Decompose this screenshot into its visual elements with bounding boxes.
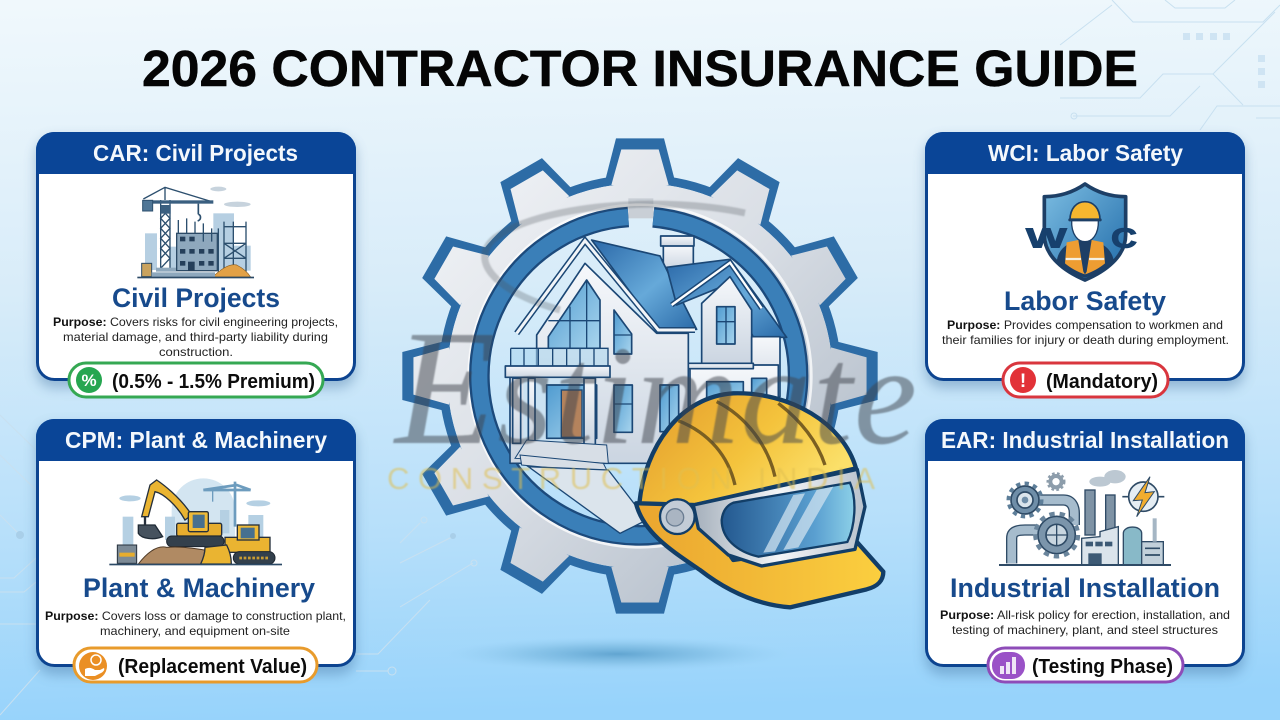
subheading: Civil Projects — [112, 283, 280, 313]
gable window — [548, 280, 600, 348]
title: 2026 CONTRACTOR INSURANCE GUIDE — [142, 40, 1138, 97]
walkway — [528, 467, 647, 533]
badge: replacement value — [74, 648, 317, 682]
purpose text: Purpose: Covers risks for civil engineering projects, — [53, 315, 338, 329]
card header — [36, 132, 356, 174]
card body — [38, 420, 354, 666]
steps — [515, 440, 608, 473]
icon: construction site — [137, 187, 254, 278]
badge: replacement value: (Replacement Value) — [118, 656, 307, 678]
purpose text: machinery, and equipment on-site — [100, 624, 290, 638]
subheading: Plant & Machinery — [83, 573, 315, 603]
purpose text — [45, 609, 346, 638]
card header — [36, 419, 356, 461]
purpose text: their families for injury or death during employment. — [942, 333, 1229, 347]
badge: premium — [69, 363, 323, 397]
card header — [925, 132, 1245, 174]
purpose text — [53, 315, 338, 359]
purpose text: Purpose: Covers loss or damage to construction plant, — [45, 609, 346, 623]
door — [561, 390, 582, 437]
purpose text: Purpose: All-risk policy for erection, installation, and — [940, 608, 1230, 622]
badge: mandatory: ! — [1020, 371, 1026, 392]
main roof — [592, 240, 697, 330]
purpose text — [942, 318, 1229, 347]
subheading: Industrial Installation — [950, 573, 1220, 603]
right wing roof — [667, 259, 787, 337]
purpose text — [940, 608, 1230, 637]
heading: WCI: Labor Safety — [988, 140, 1183, 166]
purpose text: construction. — [159, 345, 233, 359]
badge: mandatory — [1003, 363, 1168, 397]
watermark logo: Estimate — [393, 296, 917, 479]
ground shadow — [448, 637, 788, 671]
icon: factory and gears — [999, 470, 1171, 566]
visor glass — [722, 483, 854, 557]
badge: testing phase: (Testing Phase) — [1032, 656, 1173, 678]
main wall — [510, 263, 688, 463]
lower windows — [614, 385, 632, 432]
icon: worker shield — [1026, 184, 1137, 280]
dome — [639, 393, 856, 505]
house — [505, 236, 787, 533]
icon: worker shield: W — [1026, 223, 1068, 254]
panel: CPM plant and machinery — [36, 419, 356, 682]
badge: premium: % — [81, 371, 97, 390]
card header — [925, 419, 1245, 461]
purpose text: Purpose: Provides compensation to workmen and — [947, 318, 1223, 332]
purpose text: material damage, and third-party liability during — [63, 330, 328, 344]
panel: EAR industrial installation — [925, 419, 1245, 682]
heading: CAR: Civil Projects — [93, 140, 298, 166]
watermark logo — [387, 204, 917, 496]
badge: mandatory: (Mandatory) — [1046, 371, 1158, 393]
heading: CPM: Plant & Machinery — [65, 427, 327, 453]
card body — [38, 134, 354, 380]
panel: WCI labor safety — [925, 132, 1245, 397]
badge: premium: (0.5% - 1.5% Premium) — [112, 371, 315, 393]
porch — [523, 378, 593, 442]
icon: worker shield: C — [1111, 223, 1137, 254]
subheading: Labor Safety — [1004, 286, 1166, 316]
balcony — [505, 348, 610, 377]
brim — [636, 503, 883, 607]
badge: testing phase — [988, 648, 1183, 682]
card body — [926, 420, 1244, 666]
side knob — [660, 499, 695, 534]
icon: excavator and bulldozer — [109, 478, 282, 565]
panel: CAR civil projects — [36, 132, 356, 397]
gear — [400, 130, 900, 630]
chimney — [661, 236, 694, 270]
purpose text: testing of machinery, plant, and steel structures — [952, 623, 1218, 637]
card body — [926, 134, 1244, 380]
watermark logo: CONSTRUCTION INDIA — [387, 461, 875, 496]
heading: EAR: Industrial Installation — [941, 427, 1229, 453]
helmet — [636, 393, 883, 607]
visor frame — [693, 469, 865, 566]
central illustration: gear, house and helmet — [400, 130, 900, 630]
